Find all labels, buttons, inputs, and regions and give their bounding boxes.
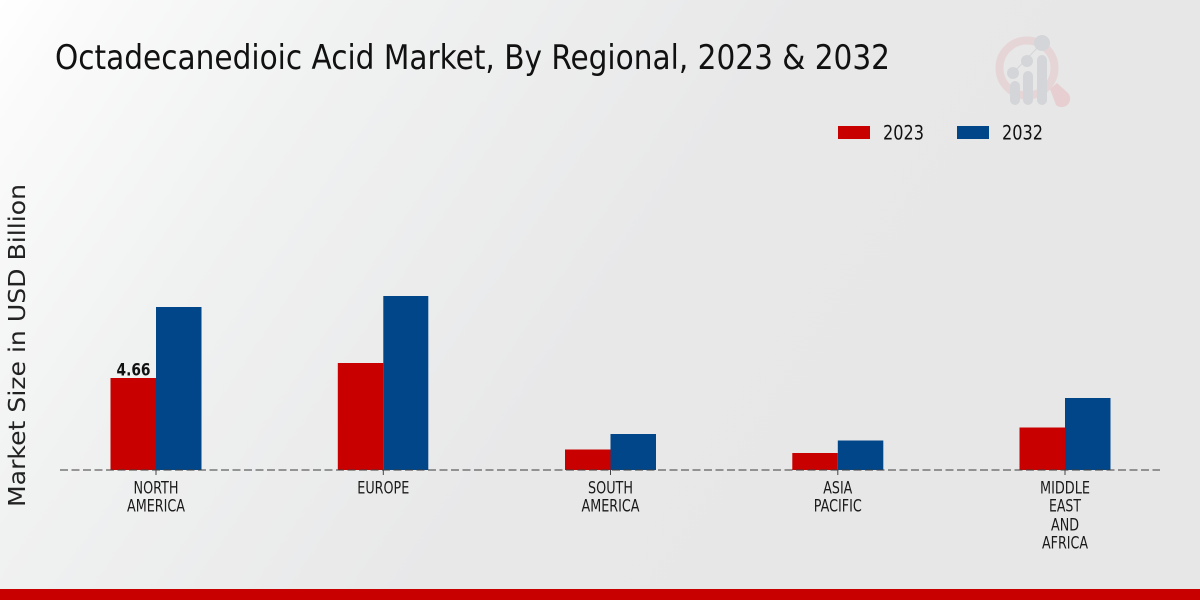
bar chart <box>60 296 1160 552</box>
group: Middle East and Africa: AFRICA <box>1042 534 1089 552</box>
group: Asia Pacific: PACIFIC <box>814 496 862 516</box>
legend: 2023 <box>838 122 924 144</box>
group: North America <box>110 307 202 516</box>
group: Middle East and Africa: MIDDLE <box>1040 478 1090 498</box>
legend: 2032 <box>957 122 1043 144</box>
group: Europe <box>338 296 428 498</box>
group: South America: AMERICA <box>582 496 640 516</box>
group: Middle East and Africa: AND <box>1051 516 1079 534</box>
group: North America: AMERICA <box>127 496 186 516</box>
legend: 2032: 2032 <box>1002 122 1043 144</box>
bottom red bar <box>0 589 1200 600</box>
group: Asia Pacific: ASIA <box>823 478 853 498</box>
legend <box>838 122 1043 144</box>
group: South America: SOUTH <box>588 478 633 498</box>
group: Middle East and Africa: EAST <box>1049 496 1082 516</box>
title: Octadecanedioic Acid Market, By Regional, 2023 & 2032 <box>55 38 890 78</box>
group: Europe: EUROPE <box>357 478 409 498</box>
group: North America: NORTH <box>134 478 178 498</box>
group: North America: 4.66 <box>116 360 150 380</box>
icon: magnifier logo watermark <box>1000 35 1070 107</box>
legend: 2023: 2023 <box>883 122 924 144</box>
y-axis label: Market Size in USD Billion <box>5 184 31 507</box>
group: Middle East and Africa <box>1020 398 1110 552</box>
group: South America <box>565 434 656 516</box>
group: Asia Pacific <box>792 440 883 516</box>
